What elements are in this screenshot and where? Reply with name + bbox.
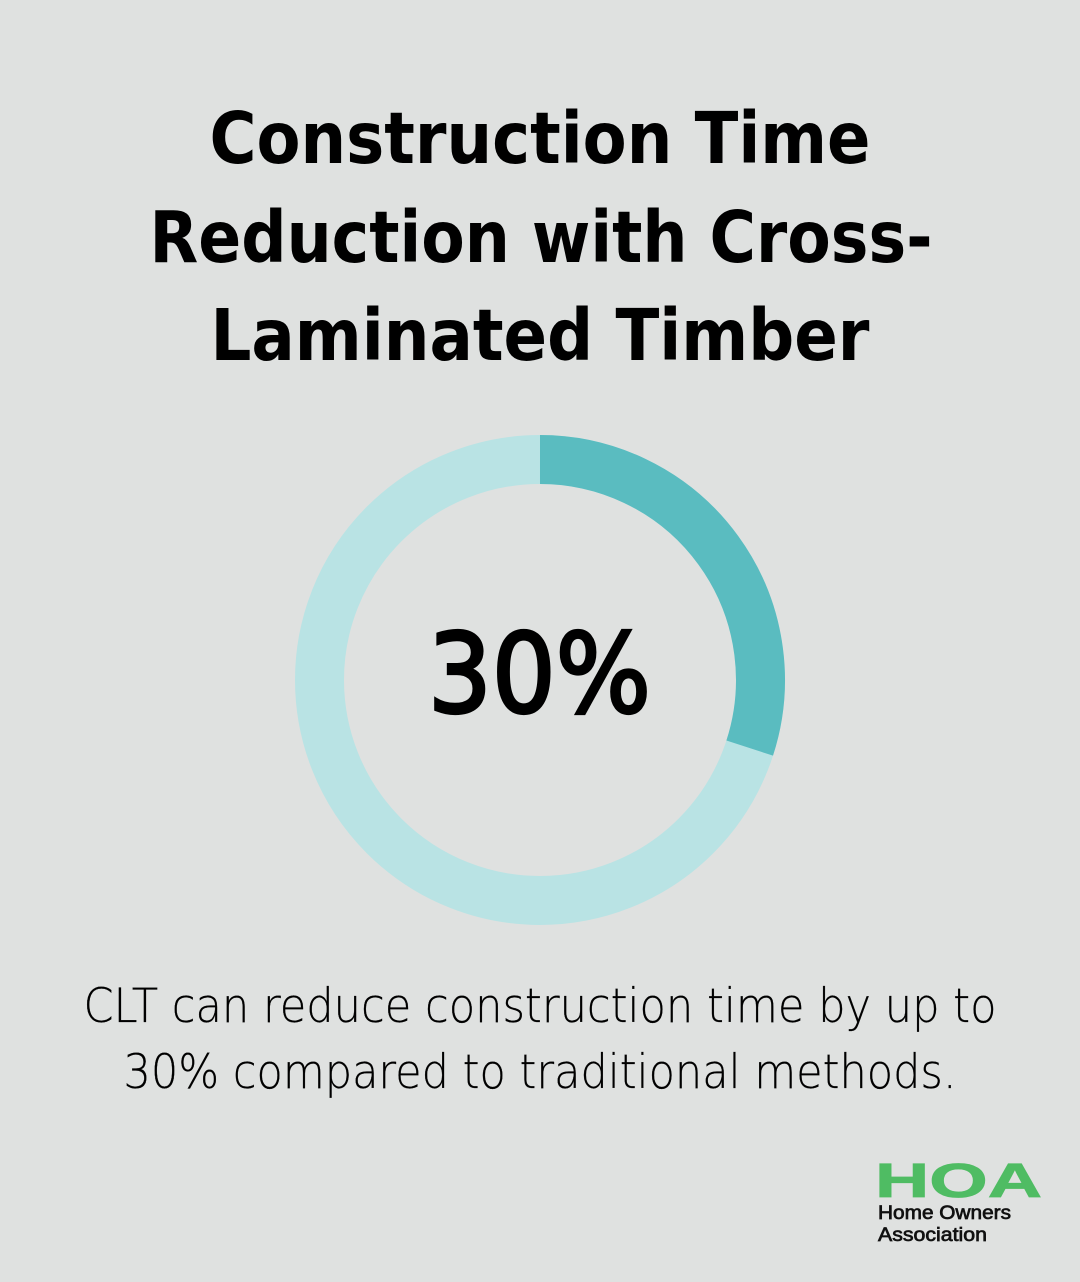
title: Reduction with Cross- bbox=[150, 196, 932, 279]
logo: HOA bbox=[875, 1155, 1042, 1246]
title bbox=[150, 97, 932, 377]
title: Construction Time bbox=[210, 97, 870, 180]
logo: HOA: HOA bbox=[875, 1155, 1042, 1208]
donut chart bbox=[320, 460, 760, 900]
title: Laminated Timber bbox=[210, 294, 870, 377]
center value: 30% bbox=[428, 610, 651, 738]
description text: 30% compared to traditional methods. bbox=[124, 1045, 956, 1100]
description text bbox=[84, 979, 996, 1100]
logo: HOA: Association bbox=[878, 1225, 987, 1246]
description text: CLT can reduce construction time by up to bbox=[84, 979, 996, 1034]
logo: HOA: Home Owners bbox=[878, 1203, 1011, 1224]
